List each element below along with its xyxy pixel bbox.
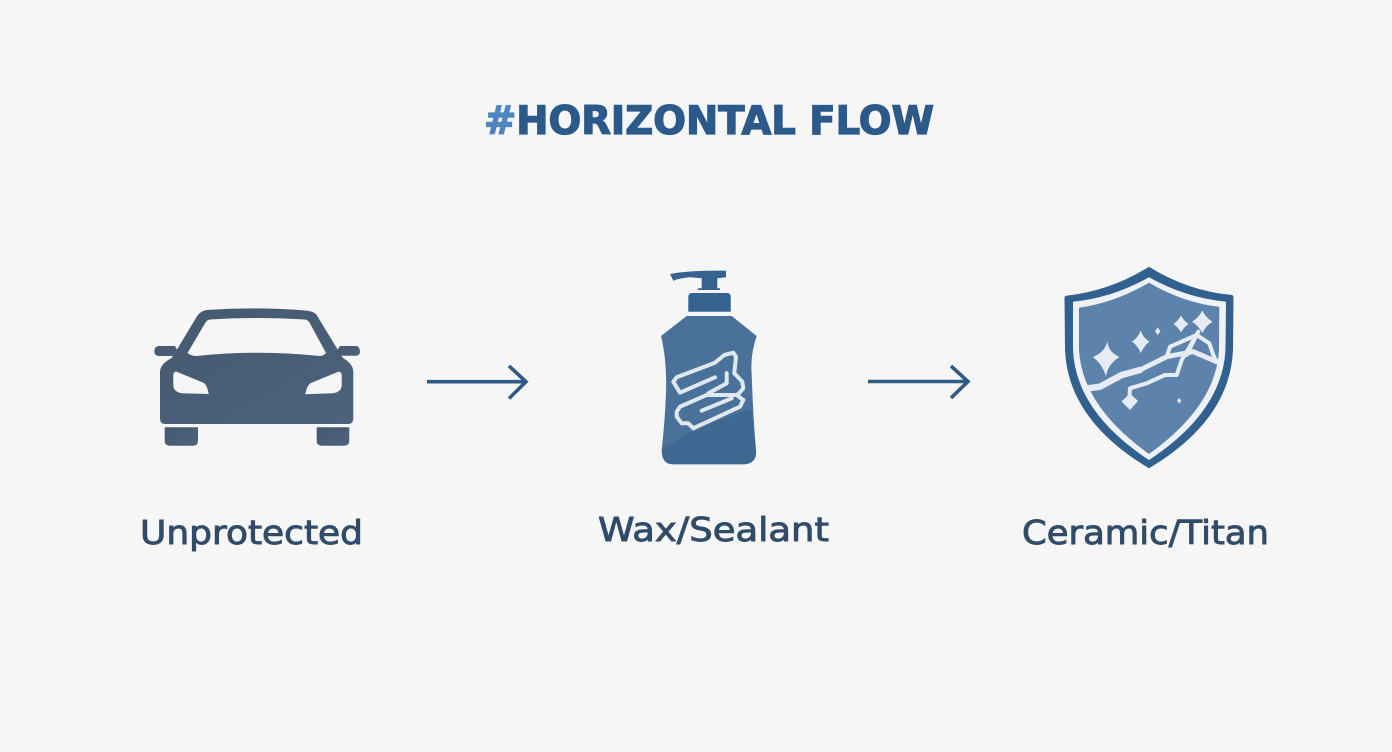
title: #HORIZONTAL FLOW — [484, 99, 934, 144]
icon: car — [154, 308, 360, 446]
shield outer — [1064, 267, 1234, 468]
body — [661, 316, 757, 464]
shield inner — [1079, 283, 1219, 454]
cracks — [1088, 332, 1216, 396]
label: Ceramic/Titan: Ceramic/Titan — [1022, 513, 1269, 552]
cap — [688, 293, 731, 312]
label: Wax/Sealant: Wax/Sealant — [598, 510, 829, 549]
arrow 1 — [427, 366, 526, 398]
icon: shield — [1064, 267, 1234, 468]
cloth squiggle — [673, 353, 743, 428]
stars — [1093, 310, 1212, 410]
pump — [670, 271, 726, 290]
shield ring — [1073, 277, 1226, 460]
label: Unprotected: Unprotected — [140, 513, 363, 552]
arrow 2 — [868, 366, 968, 398]
body shadow — [662, 409, 756, 464]
icon: bottle — [661, 271, 757, 464]
